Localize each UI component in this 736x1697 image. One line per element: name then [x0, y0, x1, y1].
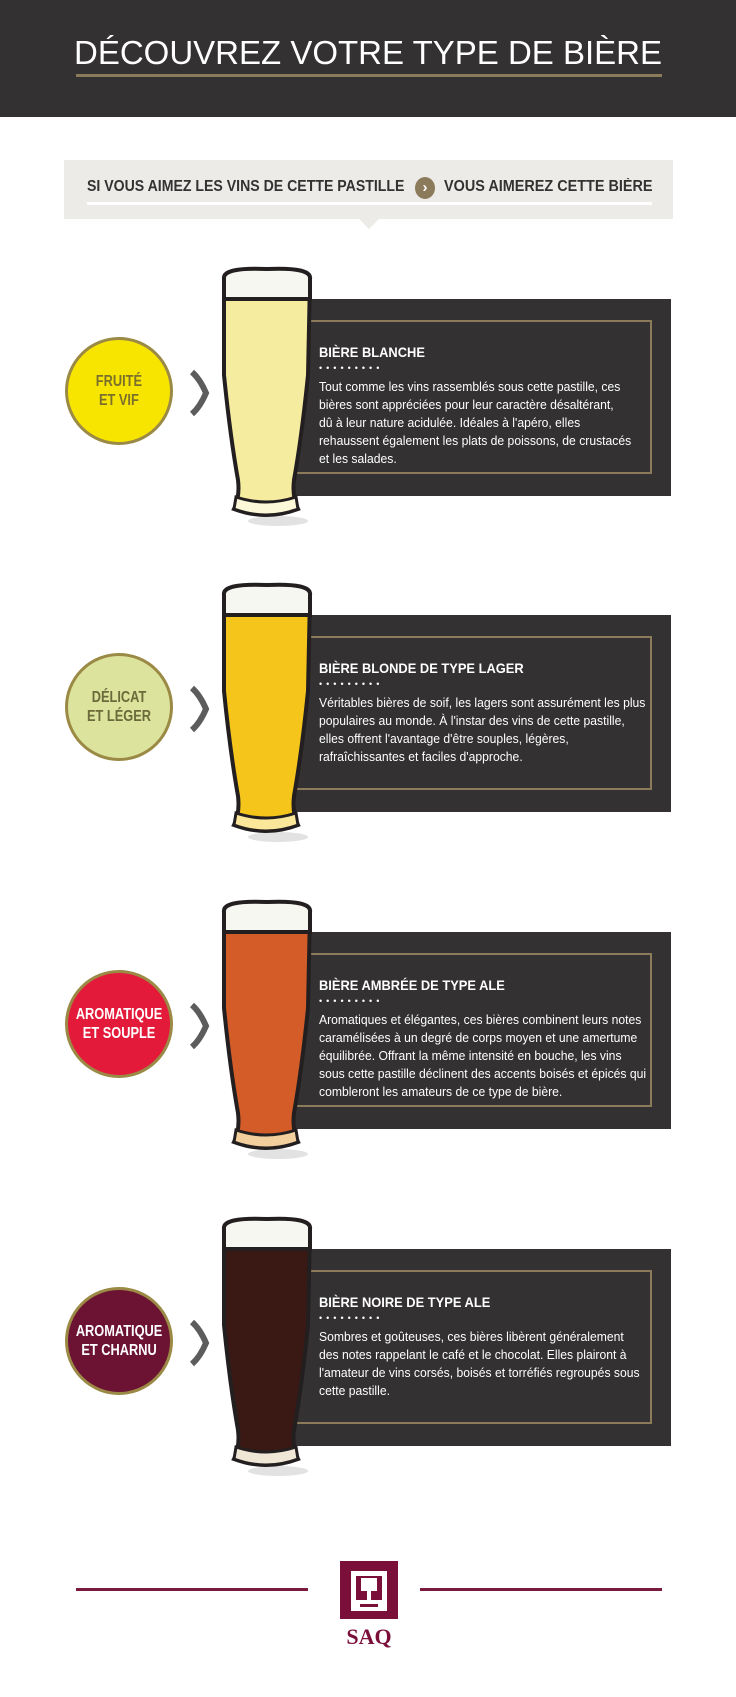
circle: fruité et vif: FRUITÉ	[96, 373, 142, 390]
logo: SAQ: SAQ	[346, 1624, 392, 1649]
arrow	[190, 1320, 210, 1366]
panel: elles offrent l'avantage d'être souples, légères,	[319, 731, 569, 746]
section: biere blonde	[65, 582, 671, 842]
panel: •••••••••	[319, 363, 383, 373]
section: biere blanche	[65, 266, 671, 526]
panel: BIÈRE BLANCHE	[319, 344, 425, 360]
banner text left: SI VOUS AIMEZ LES VINS DE CETTE PASTILLE	[87, 178, 404, 195]
panel: bières sont appréciées pour leur caractère désaltérant,	[319, 397, 614, 412]
circle: fruité et vif	[65, 337, 173, 445]
panel: populaires au monde. À l'instar des vins de cette pastille,	[319, 713, 625, 728]
panel: •••••••••	[319, 996, 383, 1006]
panel: •••••••••	[319, 1313, 383, 1323]
panel	[287, 615, 671, 812]
panel: cette pastille.	[319, 1383, 390, 1398]
panel: combleront les amateurs de ce type de bière.	[319, 1084, 562, 1099]
panel: équilibrée. Offrant la même intensité en bouche, les vins	[319, 1048, 622, 1063]
panel: BIÈRE BLONDE DE TYPE LAGER	[319, 660, 524, 676]
icon: chevron circle	[415, 177, 435, 199]
panel: l'amateur de vins corsés, boisés et torréfiés regroupés sous	[319, 1365, 640, 1380]
circle: fruité et vif: ET VIF	[99, 392, 139, 409]
circle: délicat et léger: ET LÉGER	[87, 708, 151, 725]
panel: caramélisées à un degré de corps moyen et une amertume	[319, 1030, 637, 1045]
circle: aromatique et souple: AROMATIQUE	[76, 1006, 162, 1023]
panel: Sombres et goûteuses, ces bières libèrent généralement	[319, 1329, 624, 1344]
banner text right: VOUS AIMEREZ CETTE BIÈRE	[444, 178, 653, 195]
arrow	[190, 686, 210, 732]
panel	[287, 299, 671, 496]
section: biere noire	[65, 1216, 671, 1476]
section: biere ambrée	[65, 900, 671, 1159]
panel: BIÈRE NOIRE DE TYPE ALE	[319, 1294, 490, 1310]
circle: aromatique et souple: ET SOUPLE	[83, 1025, 155, 1042]
circle: délicat et léger	[65, 653, 173, 761]
icon: glass	[222, 266, 312, 526]
footer	[76, 1561, 662, 1649]
panel	[287, 1249, 671, 1446]
icon: glass	[222, 900, 312, 1159]
panel: et les salades.	[319, 451, 397, 466]
circle: aromatique et charnu	[65, 1287, 173, 1395]
circle: aromatique et charnu: AROMATIQUE	[76, 1323, 162, 1340]
arrow	[190, 370, 210, 416]
circle: aromatique et souple	[65, 970, 173, 1078]
panel: sous cette pastille déclinent des accents boisés et épicés qui	[319, 1066, 646, 1081]
panel: rehaussent également les plats de poissons, de crustacés	[319, 433, 631, 448]
title: DÉCOUVREZ VOTRE TYPE DE BIÈRE	[74, 34, 662, 71]
panel: dû à leur nature acidulée. Idéales à l'apéro, elles	[319, 415, 580, 430]
banner	[64, 160, 673, 219]
icon: chevron circle: ›	[422, 179, 428, 196]
icon: glass	[222, 1216, 312, 1476]
header	[0, 0, 736, 117]
icon: glass	[222, 582, 312, 842]
circle: délicat et léger: DÉLICAT	[92, 689, 146, 706]
arrow	[190, 1002, 210, 1050]
panel: •••••••••	[319, 679, 383, 689]
panel: rafraîchissantes et faciles d'approche.	[319, 749, 523, 764]
panel: BIÈRE AMBRÉE DE TYPE ALE	[319, 977, 505, 993]
panel: Aromatiques et élégantes, ces bières combinent leurs notes	[319, 1012, 641, 1027]
panel: Tout comme les vins rassemblés sous cette pastille, ces	[319, 379, 620, 394]
panel: Véritables bières de soif, les lagers sont assurément les plus	[319, 695, 645, 710]
panel	[287, 932, 671, 1129]
panel: des notes rappelant le café et le chocolat. Elles plairont à	[319, 1347, 627, 1362]
logo: SAQ	[340, 1561, 398, 1649]
circle: aromatique et charnu: ET CHARNU	[81, 1342, 157, 1359]
